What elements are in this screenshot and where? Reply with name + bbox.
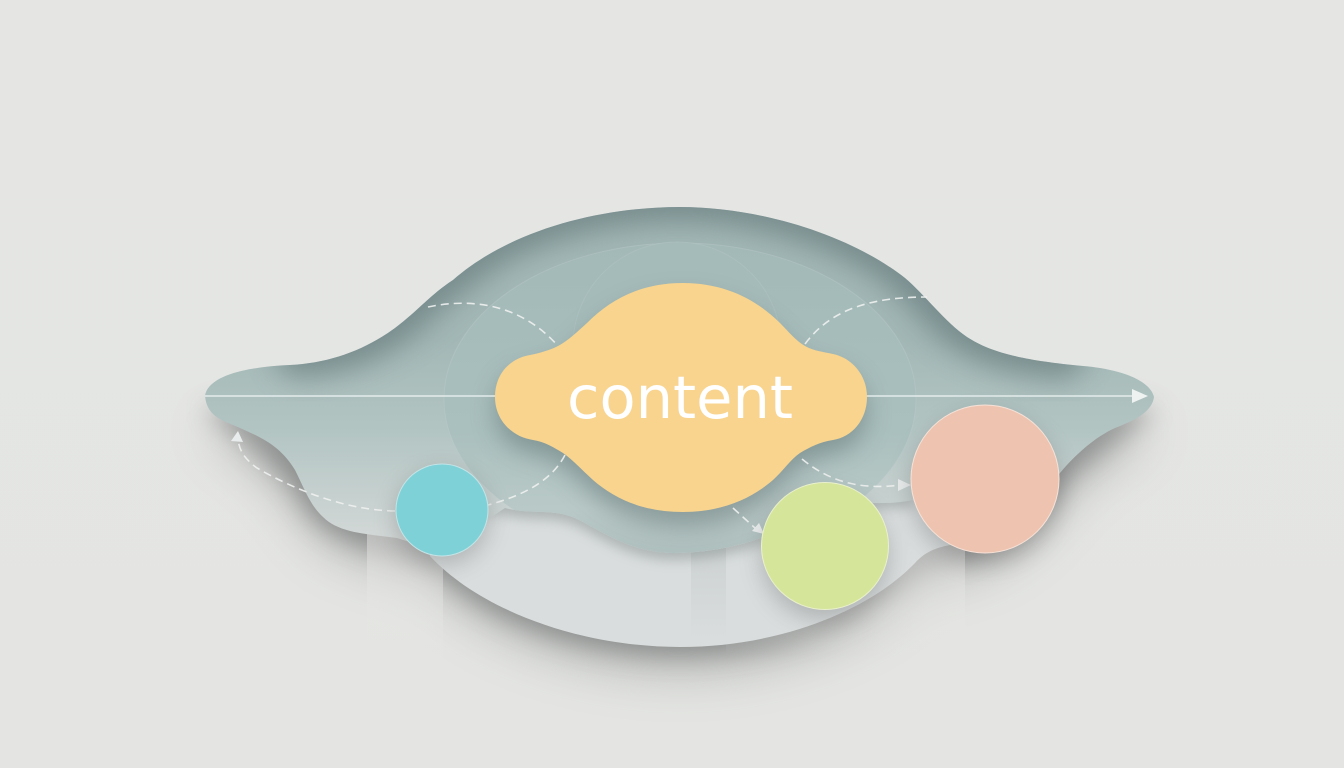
centre yellow blob	[495, 283, 867, 512]
lower light bowl	[430, 500, 950, 647]
inner circle outline	[614, 242, 738, 264]
inner shadow along top edge	[300, 197, 1060, 354]
teal circle	[396, 464, 488, 556]
circle shadows	[396, 415, 1059, 619]
green circle	[762, 482, 888, 610]
cast shadows below the shape	[205, 409, 1154, 673]
infographic canvas	[199, 207, 1162, 696]
vertical columns	[367, 530, 965, 680]
inner ring shape	[444, 243, 916, 555]
salmon circle	[911, 405, 1059, 553]
centre label: content	[567, 363, 793, 432]
dashed arcs and arrows	[238, 297, 927, 528]
main teal shape	[205, 197, 1154, 555]
horizontal arrow	[205, 389, 1148, 403]
shadow of centre blob	[486, 375, 876, 536]
arrowheads	[231, 431, 911, 534]
